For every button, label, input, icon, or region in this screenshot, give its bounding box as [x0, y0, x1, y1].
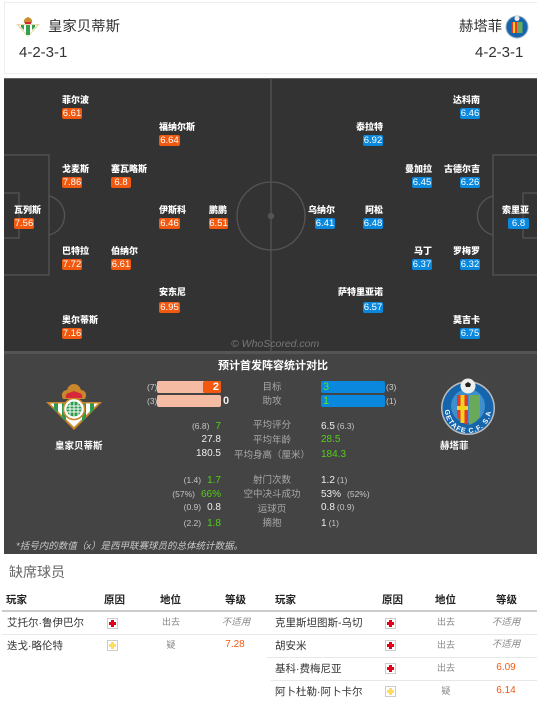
table header: 原因: 原因 — [104, 594, 125, 606]
player: 安东尼: 安东尼 — [159, 287, 186, 297]
pitch markings — [4, 78, 537, 351]
left value: shots: (1.4) 1.7 — [184, 475, 221, 486]
table header: 地位: 地位 — [435, 594, 456, 606]
label: 助攻: 助攻 — [262, 396, 282, 407]
player: 巴特拉: 巴特拉 — [62, 246, 89, 256]
table header: 地位: 地位 — [160, 594, 181, 606]
player: 古德尔吉 — [444, 164, 480, 188]
icon: injury — [385, 640, 396, 651]
crest: Getafe — [441, 378, 495, 435]
player: 阿松: 6.48 — [364, 218, 382, 229]
left value: dribbles: (0.9) 0.8 — [184, 502, 221, 513]
player: 古德尔吉: 6.26 — [461, 177, 479, 188]
table header: 玩家: 玩家 — [275, 594, 296, 606]
status: 疑 — [441, 686, 450, 696]
player: 索里亚: 6.8 — [512, 218, 525, 229]
player: 菲尔波: 6.61 — [63, 108, 81, 119]
team label: Betis: 皇家贝蒂斯 — [55, 441, 103, 452]
player: 阿松 — [363, 205, 383, 229]
row name: 艾托尔·鲁伊巴尔: 艾托尔·鲁伊巴尔 — [7, 617, 84, 629]
player: 乌纳尔: 6.41 — [316, 218, 334, 229]
player: 马丁 — [412, 246, 432, 270]
player: 戈麦斯 — [62, 164, 89, 188]
player: 鹏鹏 — [209, 205, 228, 229]
label: 摘抱: 摘抱 — [262, 518, 282, 529]
table header: 等级: 等级 — [225, 594, 246, 606]
player: 塞瓦略斯 — [111, 164, 147, 188]
player: 奥尔蒂斯: 奥尔蒂斯 — [62, 315, 98, 325]
label: 射门次数: 射门次数 — [253, 475, 291, 486]
right value: dribbles: 0.8(0.9) — [321, 502, 354, 513]
icon: doubtful — [107, 640, 118, 651]
player: 罗梅罗: 罗梅罗 — [453, 246, 480, 256]
bar: Getafe assists — [321, 395, 385, 407]
player: 伊斯科: 伊斯科 — [159, 205, 186, 215]
player: 阿松: 阿松 — [365, 205, 383, 215]
rating: 6.14 — [496, 685, 516, 696]
crest: Real Betis — [46, 384, 102, 430]
player: 鹏鹏: 鹏鹏 — [209, 205, 227, 215]
label: 平均评分: 平均评分 — [253, 420, 291, 431]
left value: height: 180.5 — [196, 448, 221, 459]
player: 泰拉特: 6.92 — [364, 135, 382, 146]
player: 安东尼: 6.95 — [160, 302, 179, 313]
label: 运球页: 运球页 — [258, 504, 286, 515]
player: 马丁: 6.37 — [413, 259, 431, 270]
player: 瓦列斯: 7.56 — [15, 218, 33, 229]
player: 福纳尔斯: 福纳尔斯 — [159, 122, 195, 132]
bar: Getafe assists: 1 — [323, 395, 329, 407]
right value: shots: 1.2(1) — [321, 475, 347, 486]
player: 塞瓦略斯: 6.8 — [114, 177, 128, 188]
team label: Getafe: 赫塔菲 — [440, 441, 469, 452]
row name: 迭戈·略伦特: 迭戈·略伦特 — [7, 640, 63, 652]
player: 菲尔波 — [62, 95, 89, 119]
rating n/a: 不适用 — [222, 617, 250, 628]
player: 达科南 — [453, 95, 480, 119]
label: 平均身高: 平均身高（厘米） — [234, 450, 310, 461]
text: (3) — [386, 382, 396, 392]
player: 巴特拉: 7.72 — [63, 259, 81, 270]
label: 平均年龄: 平均年龄 — [253, 435, 291, 446]
player: 乌纳尔: 乌纳尔 — [308, 205, 335, 215]
text: 0 — [223, 395, 229, 407]
player: 伊斯科 — [159, 204, 186, 229]
status: 出去 — [437, 663, 455, 673]
left value: tackles: (2.2) 1.8 — [184, 518, 221, 529]
player: 罗梅罗 — [453, 246, 480, 270]
formation: Betis: 4-2-3-1 — [19, 44, 67, 61]
bar: Betis assists — [157, 395, 221, 407]
player: 泰拉特: 泰拉特 — [356, 122, 383, 132]
text: (3) — [147, 396, 157, 406]
player: 福纳尔斯: 6.64 — [160, 135, 179, 146]
label: 空中决斗成功: 空中决斗成功 — [243, 489, 300, 500]
row name: 阿卜杜勒·阿卜卡尔: 阿卜杜勒·阿卜卡尔 — [275, 686, 362, 698]
table: Getafe missing players — [267, 590, 537, 702]
status: 出去 — [437, 617, 455, 627]
status: 出去 — [437, 640, 455, 650]
player: 巴特拉 — [62, 246, 89, 270]
player: 伯纳尔: 6.61 — [112, 259, 130, 270]
row name: 基科·费梅尼亚: 基科·费梅尼亚 — [275, 663, 342, 675]
left value: aerial: (57%) 66% — [172, 489, 221, 500]
rating: 6.09 — [496, 662, 516, 673]
right value: height: 184.3 — [321, 449, 346, 460]
row name: 克里斯坦图斯-乌切: 克里斯坦图斯-乌切 — [275, 617, 362, 629]
player: 萨特里亚诺 — [338, 287, 383, 313]
player: 菲尔波: 菲尔波 — [62, 95, 89, 105]
player: 福纳尔斯 — [159, 122, 195, 146]
watermark: © WhoScored.com — [231, 338, 319, 350]
heading: missing players: 缺席球员 — [9, 564, 65, 580]
right value: tackles: 1(1) — [321, 518, 339, 529]
player: 泰拉特 — [356, 122, 383, 146]
footnote: *括号内的数值（x）是西甲联赛球员的总体统计数据。 — [16, 541, 243, 552]
bar: Betis goals — [157, 381, 221, 393]
player: 伊斯科: 6.46 — [160, 218, 179, 229]
player: 伯纳尔: 伯纳尔 — [111, 246, 138, 256]
player: 曼加拉: 曼加拉 — [405, 164, 432, 174]
right value: rating: 6.5(6.3) — [321, 421, 354, 432]
player: 萨特里亚诺: 萨特里亚诺 — [338, 287, 383, 297]
table header: 等级: 等级 — [496, 594, 517, 606]
icon: Getafe crest small — [506, 16, 528, 38]
bar: Getafe goals — [321, 381, 385, 393]
table: Betis missing players — [2, 594, 267, 652]
left value: rating: (6.8) 7 — [192, 421, 221, 432]
text: (7) — [147, 382, 157, 392]
player: 鹏鹏: 6.51 — [209, 218, 228, 229]
table header: 玩家: 玩家 — [6, 594, 27, 606]
panel: lineup statistics comparison — [4, 354, 537, 554]
player: 马丁: 马丁 — [414, 246, 432, 256]
player: 乌纳尔 — [308, 205, 335, 229]
player: 安东尼 — [159, 286, 186, 313]
player: 莫吉卡 — [453, 315, 480, 339]
team name: Betis: 皇家贝蒂斯 — [48, 19, 120, 35]
rating n/a: 不适用 — [492, 639, 520, 650]
formation: Getafe: 4-2-3-1 — [475, 44, 523, 61]
player: 萨特里亚诺: 6.57 — [364, 302, 382, 313]
player: 塞瓦略斯: 塞瓦略斯 — [111, 164, 147, 174]
right value: aerial: 53% (52%) — [321, 489, 370, 500]
player: 达科南: 6.46 — [461, 108, 479, 119]
status: 疑 — [166, 640, 176, 650]
rating: 7.28 — [225, 639, 245, 650]
player: 曼加拉: 6.45 — [413, 177, 431, 188]
row name: 胡安米: 胡安米 — [275, 640, 306, 652]
status: 出去 — [162, 617, 180, 627]
right value: age: 28.5 — [321, 434, 340, 445]
player: 瓦列斯 — [14, 204, 41, 229]
table header: 原因: 原因 — [382, 594, 403, 606]
player: 瓦列斯: 瓦列斯 — [14, 205, 41, 215]
left value: age: 27.8 — [202, 434, 221, 445]
icon: injury — [385, 663, 396, 674]
player: 罗梅罗: 6.32 — [461, 259, 479, 270]
bar: Betis goals: 2 — [213, 381, 219, 393]
panel: pitch — [4, 78, 537, 354]
player: 戈麦斯: 7.86 — [63, 177, 81, 188]
header panel — [4, 2, 537, 74]
player: 伯纳尔 — [111, 246, 138, 270]
player: 奥尔蒂斯 — [62, 314, 98, 339]
player: 索里亚 — [502, 205, 529, 229]
player: 古德尔吉: 古德尔吉 — [444, 164, 480, 174]
label: 目标: 目标 — [262, 382, 282, 393]
player: 索里亚: 索里亚 — [502, 205, 529, 215]
team name: Getafe: 赫塔菲 — [459, 19, 502, 35]
player: 莫吉卡: 6.75 — [461, 328, 479, 339]
player: 戈麦斯: 戈麦斯 — [62, 164, 89, 174]
icon: injury — [385, 618, 396, 629]
player: 奥尔蒂斯: 7.16 — [63, 328, 81, 339]
player: 莫吉卡: 莫吉卡 — [453, 315, 480, 325]
icon: Real Betis crest small — [16, 17, 40, 37]
text: (1) — [386, 396, 396, 406]
player: 曼加拉 — [405, 164, 432, 188]
bar: Getafe goals: 3 — [323, 381, 329, 393]
rating n/a: 不适用 — [492, 617, 520, 628]
icon: doubtful — [385, 686, 396, 697]
icon: injury — [107, 618, 118, 629]
player: 达科南: 达科南 — [453, 95, 480, 105]
stats title: 预计首发阵容统计对比 — [218, 360, 328, 372]
